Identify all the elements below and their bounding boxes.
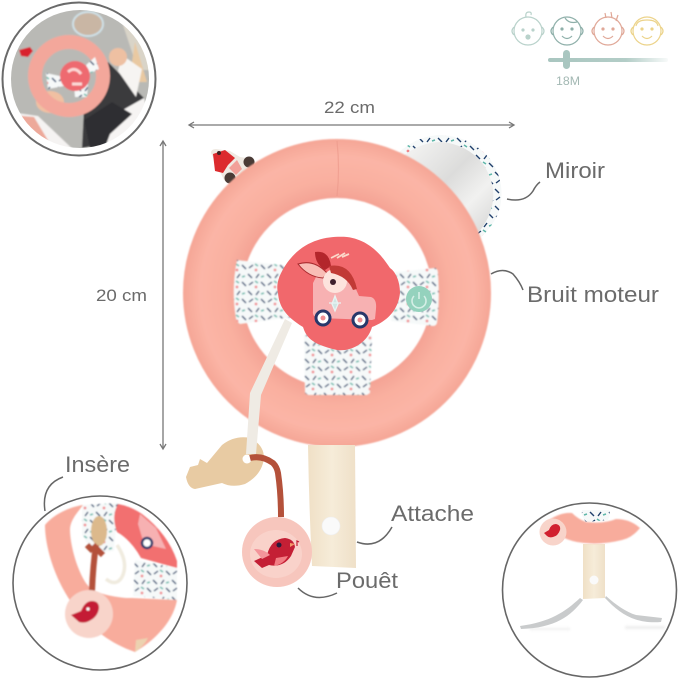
slider handle — [563, 50, 570, 69]
car detail — [138, 514, 166, 549]
plush ring section — [45, 505, 177, 652]
steering wheel toy — [186, 135, 502, 587]
panel: insert detail circle — [13, 496, 187, 670]
panel: in-use photo circle — [2, 2, 158, 158]
squeaker ball — [242, 517, 312, 587]
deer — [298, 252, 357, 311]
icon: baby face — [551, 17, 583, 45]
deer car hub — [277, 237, 400, 350]
white loop — [106, 545, 125, 583]
age scale — [512, 12, 668, 88]
label: Bruit moteur — [491, 270, 659, 307]
patterned spoke top — [582, 510, 610, 522]
height label: 20 cm — [96, 286, 147, 305]
white ribbon — [246, 319, 292, 454]
patterned spoke — [82, 503, 118, 553]
label: Bruit moteur: Bruit moteur — [527, 282, 659, 307]
key hole — [242, 454, 252, 464]
width label: 22 cm — [324, 98, 375, 117]
red cord — [250, 457, 281, 517]
icon: toy car tag — [211, 149, 256, 184]
wooden key — [186, 437, 264, 489]
snap button — [322, 517, 340, 535]
car wheels — [316, 311, 367, 327]
bird — [71, 601, 99, 623]
strap tip — [135, 638, 148, 652]
slider track — [548, 58, 668, 62]
icon: toddler face — [592, 12, 624, 45]
label: Miroir — [507, 158, 605, 200]
wheel spokes — [234, 260, 439, 395]
fabric strap — [308, 445, 356, 568]
panel: strap attachment detail circle — [502, 503, 676, 677]
width dimension arrow — [189, 122, 514, 128]
icon: newborn face — [512, 12, 544, 45]
wooden key tip — [91, 516, 107, 546]
bird eye — [86, 607, 90, 611]
squeaker ball — [540, 518, 566, 546]
patterned lower spoke — [133, 560, 177, 600]
strap — [583, 544, 605, 599]
plush ring section — [545, 513, 640, 544]
label: Miroir: Miroir — [545, 158, 605, 183]
bird — [544, 524, 560, 537]
car wheel — [142, 538, 152, 548]
age label: 18M — [556, 74, 580, 88]
red cord — [87, 545, 103, 591]
label: Insère: Insère — [65, 452, 130, 477]
metal seat bar — [520, 596, 662, 629]
label: Attache — [357, 501, 474, 544]
label: Attache: Attache — [391, 501, 474, 526]
height dimension arrow — [160, 141, 166, 449]
label: Insère — [44, 452, 130, 511]
icon: child face — [631, 17, 663, 45]
pink car — [313, 277, 376, 320]
snap — [590, 576, 598, 584]
label: Pouêt: Pouêt — [336, 568, 398, 593]
squeaker ball — [65, 590, 113, 638]
hub section — [114, 504, 177, 568]
table shadows — [530, 626, 665, 630]
label: Pouêt — [298, 568, 398, 597]
power button — [406, 286, 432, 312]
mirror — [398, 135, 502, 238]
plush ring — [212, 141, 462, 418]
